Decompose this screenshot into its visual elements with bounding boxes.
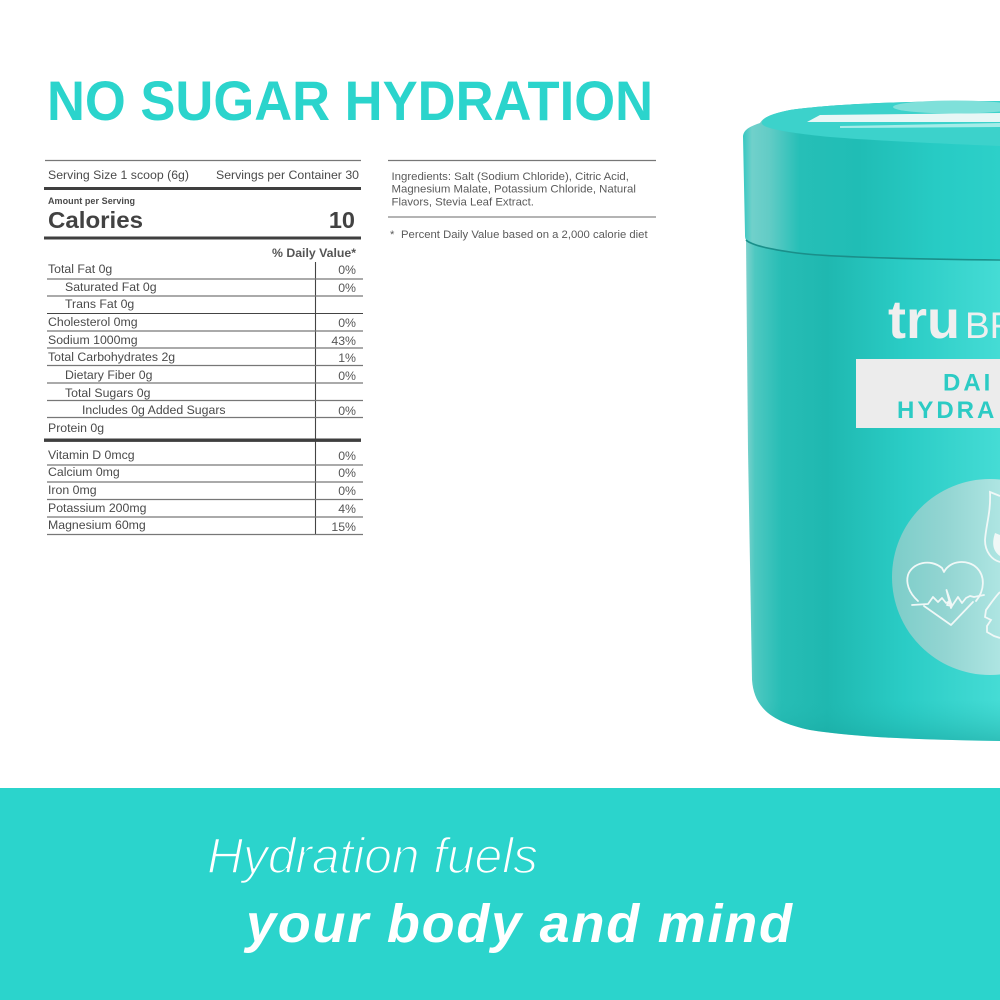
nutrition facts table: Potassium 200mg: [48, 501, 147, 515]
amount per serving: Amount per Serving: [48, 196, 135, 206]
icon: head profile: [985, 592, 1000, 638]
ingredients text: Flavors, Stevia Leaf Extract.: [392, 196, 534, 208]
nutrition facts table: Total Sugars 0g: [65, 386, 151, 400]
nutrition facts table: 0%: [338, 449, 356, 463]
icon circle: [892, 479, 1000, 675]
icon: heart with pulse: [907, 562, 984, 625]
title: NO SUGAR HYDRATION: [47, 69, 653, 132]
nutrition facts table: Cholesterol 0mg: [48, 315, 138, 329]
nutrition facts table: 0%: [338, 369, 356, 383]
serving size: Serving Size 1 scoop (6g): [48, 168, 189, 182]
ingredients panel: [388, 160, 656, 241]
nutrition facts table: Iron 0mg: [48, 483, 97, 497]
servings per container: Servings per Container 30: [216, 168, 359, 182]
nutrition facts table: 15%: [331, 520, 356, 534]
nutrition facts table: 43%: [331, 334, 356, 348]
lid emblem: [893, 100, 1000, 114]
nutrition facts table: Dietary Fiber 0g: [65, 368, 153, 382]
nutrition facts table: Vitamin D 0mcg: [48, 448, 135, 462]
nutrition facts table: Sodium 1000mg: [48, 333, 138, 347]
daily value footnote: Percent Daily Value based on a 2,000 calorie diet: [401, 229, 648, 241]
nutrition facts table: Total Fat 0g: [48, 262, 112, 276]
calories label: Calories: [48, 207, 143, 233]
icon: water drop: [985, 492, 1000, 562]
daily value heading: % Daily Value*: [272, 246, 356, 260]
calories value: 10: [329, 207, 355, 233]
nutrition facts table: 0%: [338, 281, 356, 295]
nutrition facts table: 0%: [338, 484, 356, 498]
lid label strip: [807, 113, 1000, 122]
ingredients text: Ingredients: Salt (Sodium Chloride), Citric Acid,: [392, 171, 629, 183]
jar body: [746, 240, 1000, 741]
lid shadow line: [746, 240, 1000, 260]
nutrition facts table: [44, 160, 363, 535]
nutrition facts table: Calcium 0mg: [48, 465, 120, 479]
nutrition facts table: 0%: [338, 263, 356, 277]
nutrition facts table: 4%: [338, 502, 356, 516]
product name: HYDRA: [897, 397, 997, 424]
nutrition facts table: Trans Fat 0g: [65, 297, 134, 311]
jar lid: [743, 101, 1000, 259]
brand name: tru: [888, 290, 960, 350]
nutrition facts table: 0%: [338, 466, 356, 480]
nutrition facts table: Total Carbohydrates 2g: [48, 350, 175, 364]
lid top surface: [762, 101, 1000, 146]
tagline line two: your body and mind: [243, 894, 793, 954]
nutrition facts table: Includes 0g Added Sugars: [82, 403, 226, 417]
bottom banner: [0, 788, 1000, 1000]
nutrition facts table: 0%: [338, 404, 356, 418]
nutrition facts table: 0%: [338, 316, 356, 330]
nutrition facts table: 1%: [338, 351, 356, 365]
ingredients text: Magnesium Malate, Potassium Chloride, Natural: [392, 184, 636, 196]
product name: DAI: [943, 370, 993, 396]
tagline line one: Hydration fuels: [207, 828, 538, 884]
daily value footnote: *: [390, 229, 395, 241]
product jar: [743, 100, 1000, 741]
nutrition facts table: Protein 0g: [48, 421, 104, 435]
label box: [856, 359, 1000, 428]
nutrition facts table: Saturated Fat 0g: [65, 280, 157, 294]
nutrition facts table: Magnesium 60mg: [48, 518, 146, 532]
